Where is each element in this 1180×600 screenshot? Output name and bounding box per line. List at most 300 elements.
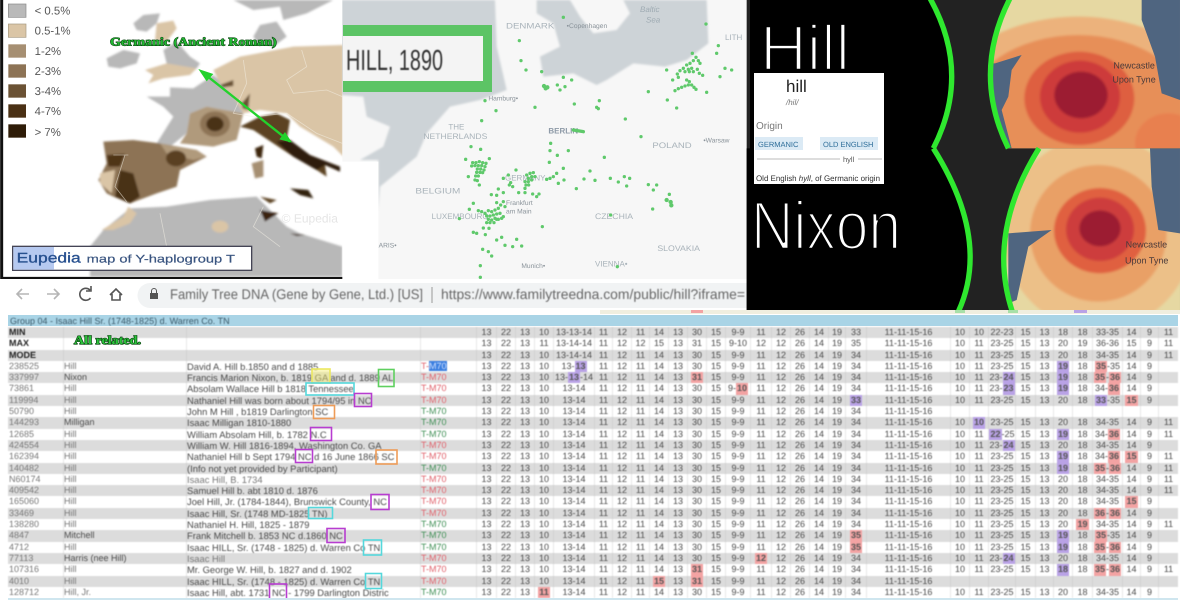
row 238525: 9 bbox=[1147, 361, 1152, 371]
row 119994: 19 bbox=[832, 395, 842, 405]
row MIN: 12 bbox=[617, 327, 627, 337]
row 77113: 12 bbox=[776, 553, 786, 563]
row MAX: 12 bbox=[756, 338, 766, 348]
row 4847: 12 bbox=[776, 530, 786, 540]
row 73861: 13 bbox=[520, 383, 530, 393]
row 128712: 13 bbox=[673, 587, 683, 597]
row N60174: 19 bbox=[832, 474, 842, 484]
row 409542: 9 bbox=[1147, 485, 1152, 495]
white patch bbox=[340, 162, 378, 280]
row 140482: 10 bbox=[955, 463, 965, 473]
row 337997: Francis Marion Nixon, b. 1819 GA and d. 1889 AL bbox=[187, 372, 393, 383]
row 128712: 11 bbox=[974, 587, 984, 597]
row MODE: 13 bbox=[481, 350, 492, 360]
row 12685: 22 bbox=[990, 429, 1000, 439]
row 12685: 19 bbox=[1058, 429, 1068, 439]
row 424554: 10 bbox=[955, 440, 965, 450]
row 4010: 11 bbox=[599, 576, 608, 586]
row 107316: 34 bbox=[851, 564, 861, 574]
row 4010: 19 bbox=[832, 576, 842, 586]
row MAX: 15 bbox=[711, 338, 721, 348]
row 138280: 13 bbox=[673, 519, 683, 529]
row 165060: 15 bbox=[711, 496, 721, 506]
row 138280: 9-9 bbox=[731, 519, 744, 529]
row 4847: 14 bbox=[1126, 530, 1136, 540]
row 77113: Isaac Hill bbox=[187, 553, 225, 564]
row 138280: T-M70 bbox=[421, 519, 447, 529]
row 73861: 11 bbox=[599, 383, 608, 393]
row 128712: 11 bbox=[636, 587, 645, 597]
row 140482: 14 bbox=[654, 463, 664, 473]
row 424554: William W. Hill 1816-1894, Washington Co. GA bbox=[187, 440, 382, 451]
row 409542 bbox=[8, 485, 1178, 496]
heat map: Hill bbox=[993, 0, 1180, 148]
row MIN bbox=[8, 327, 1178, 338]
row 409542: 12 bbox=[617, 485, 627, 495]
row 50790: 26 bbox=[795, 406, 805, 416]
row 77113: 26 bbox=[795, 553, 805, 563]
row 128712: 15 bbox=[711, 587, 721, 597]
row 4847: 14 bbox=[654, 530, 664, 540]
row MIN: 26 bbox=[795, 327, 805, 337]
row 107316: 11 bbox=[756, 564, 766, 574]
row 162394: 10 bbox=[955, 451, 965, 461]
address text: site name: Family Tree DNA (Gene by Gene, Ltd.) [US] bbox=[170, 286, 423, 302]
row 12685: 18 bbox=[1077, 429, 1088, 439]
row 144293: 9-9 bbox=[731, 417, 744, 427]
row 165060: 22 bbox=[501, 496, 511, 506]
row 107316: 14 bbox=[654, 564, 664, 574]
row 4712: 14 bbox=[654, 542, 664, 552]
row 4712: 12 bbox=[776, 542, 786, 552]
row 140482: 13 bbox=[673, 463, 683, 473]
row 162394: 14 bbox=[654, 451, 664, 461]
row 138280: 34 bbox=[851, 519, 861, 529]
dictionary card: hill: Origin bbox=[756, 121, 783, 132]
row 424554: 30 bbox=[692, 440, 702, 450]
row N60174: 12 bbox=[617, 474, 627, 484]
row 107316: 19 bbox=[832, 564, 842, 574]
row 238525: 238525 bbox=[9, 361, 39, 371]
callout: HILL, 1890: HILL, 1890 bbox=[346, 45, 443, 77]
label: Newcastle Upon Tyne: Newcastle bbox=[1113, 60, 1155, 70]
row 4712: 11 bbox=[599, 542, 608, 552]
row MODE: 13 bbox=[673, 350, 683, 360]
row 238525 bbox=[8, 361, 1178, 372]
row 337997: 18 bbox=[1077, 372, 1088, 382]
row 337997: 13- -14 bbox=[555, 372, 593, 382]
row 12685: 14 bbox=[654, 429, 664, 439]
row MAX: 11-11-15-16 bbox=[885, 338, 932, 348]
row 77113: 11-11-15-16 bbox=[885, 553, 932, 563]
row 138280: 14 bbox=[654, 519, 664, 529]
row 73861: 10 bbox=[955, 383, 965, 393]
row 4847: 13 bbox=[481, 530, 492, 540]
row 12685: 13 bbox=[481, 429, 492, 439]
row 165060: 18 bbox=[1077, 496, 1088, 506]
row 4712: 11 bbox=[756, 542, 766, 552]
row MAX: 19 bbox=[832, 338, 842, 348]
row 12685: T-M70 bbox=[421, 429, 447, 439]
row 4847: 11 bbox=[636, 530, 645, 540]
row 33469: 14 bbox=[814, 508, 824, 518]
row 409542: 11 bbox=[599, 485, 608, 495]
row 12685: 19 bbox=[832, 429, 842, 439]
row 107316: 22 bbox=[501, 564, 511, 574]
row 33469: 14 bbox=[1126, 508, 1136, 518]
row 4847: 14 bbox=[814, 530, 824, 540]
row 424554: 34-35 bbox=[1096, 440, 1119, 450]
row 33469: 20 bbox=[1058, 508, 1068, 518]
row 144293: 11 bbox=[599, 417, 608, 427]
row 4847: 13 bbox=[673, 530, 683, 540]
row 73861: 11 bbox=[974, 383, 984, 393]
row 12685 bbox=[8, 429, 1178, 440]
row 77113: 9 bbox=[1147, 553, 1152, 563]
row 409542: 14 bbox=[654, 485, 664, 495]
row 140482: 15 bbox=[711, 463, 721, 473]
row 73861: 26 bbox=[795, 383, 805, 393]
row MAX: 13 bbox=[520, 338, 530, 348]
dictionary card: hill: /hil/ bbox=[785, 98, 799, 107]
row 424554: 14 bbox=[814, 440, 824, 450]
row 4712: 18 bbox=[1077, 542, 1088, 552]
row 140482: 18 bbox=[1077, 463, 1088, 473]
row 119994: 15 bbox=[1126, 395, 1136, 405]
row 33469: 9 bbox=[1147, 508, 1152, 518]
row MODE: 23-25 bbox=[990, 350, 1014, 360]
row MAX: 15 bbox=[1020, 338, 1030, 348]
arc: inner left top bbox=[930, 0, 952, 148]
row 50790: 15 bbox=[711, 406, 721, 416]
row 4847 bbox=[8, 530, 1178, 542]
row MAX: 15 bbox=[1126, 338, 1136, 348]
map label: Slovakia: SLOVAKIA bbox=[657, 244, 700, 253]
row 165060: 13 bbox=[520, 496, 530, 506]
row 140482: 11 bbox=[974, 463, 984, 473]
row 337997: 13 bbox=[520, 372, 530, 382]
row 144293: 20 bbox=[1058, 417, 1068, 427]
highlight: NC bbox=[371, 494, 389, 510]
row 12685: Hill bbox=[64, 429, 76, 439]
row 33469: T-M70 bbox=[421, 508, 447, 518]
row N60174: 13 bbox=[520, 474, 530, 484]
row 12685: 11 bbox=[756, 429, 766, 439]
row 33469: Hill bbox=[64, 508, 76, 518]
row MIN: 10 bbox=[974, 327, 984, 337]
row 77113: T-M70 bbox=[421, 553, 447, 563]
row 73861: 10 bbox=[737, 383, 747, 393]
row 77113: 34 bbox=[851, 553, 861, 563]
row 409542: 22 bbox=[501, 485, 511, 495]
row 140482: 11 bbox=[1164, 463, 1173, 473]
row 33469: 11 bbox=[974, 508, 984, 518]
row 107316: 26 bbox=[795, 564, 805, 574]
row 50790: 11 bbox=[599, 406, 608, 416]
row 424554: 13 bbox=[481, 440, 492, 450]
row 162394: 23-25 bbox=[990, 451, 1014, 461]
row 73861: 13 bbox=[673, 383, 683, 393]
highlight: SC bbox=[314, 406, 334, 418]
row 424554: 12 bbox=[617, 440, 627, 450]
row 238525: 11-11-15-16 bbox=[885, 361, 932, 371]
row 138280: 13 bbox=[1039, 519, 1050, 529]
row 238525: -35 bbox=[1107, 361, 1120, 371]
row 77113: 23- bbox=[989, 553, 1002, 563]
row 162394: 9-9 bbox=[731, 451, 744, 461]
row 4010: 13 bbox=[481, 576, 492, 586]
highlight: TN bbox=[366, 574, 382, 588]
row MODE: 14 bbox=[814, 350, 824, 360]
row 119994: 33 bbox=[851, 395, 861, 405]
row 144293: 34-35 bbox=[1096, 417, 1119, 427]
dictionary card: hill: hyll bbox=[843, 155, 855, 164]
row 73861: 9- bbox=[728, 383, 736, 393]
legend label: 1-2% bbox=[35, 45, 61, 58]
row 162394: 34- bbox=[1095, 451, 1108, 461]
row 337997: 24 bbox=[1004, 372, 1014, 382]
row 77113: 77113 bbox=[9, 553, 33, 563]
row 33469: 11 bbox=[636, 508, 645, 518]
row 424554: 11 bbox=[756, 440, 766, 450]
row 409542: 12 bbox=[776, 485, 786, 495]
row 50790: John M Hill , b1819 Darlington SC bbox=[187, 406, 328, 417]
row N60174: 9-9 bbox=[731, 474, 744, 484]
row 33469: 11-11-15-16 bbox=[885, 508, 932, 518]
highlight: N.C bbox=[310, 428, 332, 440]
row MAX: 11 bbox=[599, 338, 608, 348]
row 138280: 11 bbox=[636, 519, 645, 529]
row 107316: 14 bbox=[1126, 564, 1136, 574]
row 107316: - bbox=[1106, 564, 1109, 574]
row 144293: 11-11-15-16 bbox=[885, 417, 932, 427]
row 73861: 11 bbox=[756, 383, 766, 393]
row 4712: 23-25 bbox=[990, 542, 1014, 552]
row 33469: 34 bbox=[851, 508, 861, 518]
panel: Eupedia haplogroup T map bbox=[0, 0, 343, 279]
row 424554: 424554 bbox=[9, 440, 39, 450]
row N60174: 14 bbox=[654, 474, 664, 484]
row 424554: 22 bbox=[501, 440, 511, 450]
row 4847: 9-9 bbox=[731, 530, 744, 540]
row 162394: 19 bbox=[1058, 451, 1068, 461]
row 238525: 19 bbox=[1058, 361, 1068, 371]
row 50790: 11 bbox=[756, 406, 766, 416]
row 4847: 13 bbox=[1039, 530, 1050, 540]
row MODE: 10 bbox=[955, 350, 965, 360]
row 162394: 15 bbox=[1126, 451, 1136, 461]
row 119994: T-M70 bbox=[421, 395, 447, 405]
row 50790: T-M70 bbox=[421, 406, 447, 416]
row N60174: 10 bbox=[539, 474, 549, 484]
legend label: 2-3% bbox=[35, 65, 61, 78]
row 165060: 11 bbox=[599, 496, 608, 506]
row 77113 bbox=[8, 553, 1178, 564]
row 33469: 15 bbox=[1020, 508, 1030, 518]
row 409542: 18 bbox=[1077, 485, 1088, 495]
row 238525: 10 bbox=[539, 361, 549, 371]
row MIN: 10 bbox=[539, 327, 549, 337]
row 144293: 13 bbox=[1039, 417, 1050, 427]
dictionary card: hill: GERMANIC bbox=[758, 140, 799, 149]
row 33469: 12 bbox=[776, 508, 786, 518]
row 162394: 14 bbox=[814, 451, 824, 461]
row 424554: 18 bbox=[1077, 440, 1088, 450]
row 107316: T-M70 bbox=[421, 564, 447, 574]
row 119994: 11-11-15-16 bbox=[885, 395, 932, 405]
row 107316: 13 bbox=[481, 564, 492, 574]
row 409542: 19 bbox=[832, 485, 842, 495]
row 162394: 162394 bbox=[9, 451, 39, 461]
dictionary card: hill: OLD ENGLISH bbox=[823, 140, 873, 149]
row 119994: 9 bbox=[1147, 395, 1152, 405]
row N60174: 11 bbox=[1164, 474, 1173, 484]
row 128712: 14 bbox=[1126, 587, 1136, 597]
row 140482: 10 bbox=[539, 463, 549, 473]
row N60174: 30 bbox=[692, 474, 702, 484]
row 4010: Isaac HILL, Sr. (1748 - 1825) d. Warren Co TN bbox=[187, 576, 380, 587]
row 144293: 13 bbox=[673, 417, 683, 427]
row 138280: 19 bbox=[832, 519, 842, 529]
row 337997: 26 bbox=[795, 372, 805, 382]
row 4712: 11 bbox=[974, 542, 984, 552]
row 4010: 22 bbox=[501, 576, 511, 586]
highlight: Tennessee bbox=[306, 383, 354, 395]
row MIN: 14 bbox=[1126, 327, 1136, 337]
row 12685: 10 bbox=[955, 429, 965, 439]
icon: back arrow bbox=[17, 289, 29, 299]
row MIN: 19 bbox=[832, 327, 842, 337]
row 77113: 34-35 bbox=[1096, 553, 1119, 563]
row 107316: 12 bbox=[617, 564, 627, 574]
row 77113: 14 bbox=[654, 553, 664, 563]
row MIN: 11 bbox=[1164, 327, 1173, 337]
row 119994: 13 bbox=[481, 395, 492, 405]
row MIN: 33-35 bbox=[1096, 327, 1119, 337]
row 33469: 22 bbox=[501, 508, 511, 518]
row 33469: 36 bbox=[1110, 508, 1120, 518]
row 4712: Isaac HILL, Sr. (1748 - 1825) d. Warren Co TN bbox=[187, 542, 380, 553]
row 140482: 36 bbox=[1110, 463, 1120, 473]
row 50790: 13-14 bbox=[562, 406, 586, 416]
callout: HILL, 1890 bbox=[343, 25, 492, 92]
row N60174: 20 bbox=[1058, 474, 1068, 484]
row 138280: 26 bbox=[795, 519, 805, 529]
row 107316: 9-9 bbox=[731, 564, 744, 574]
row 140482: 19 bbox=[832, 463, 842, 473]
row MAX: 15 bbox=[654, 338, 664, 348]
row 409542: 11 bbox=[636, 485, 645, 495]
row 424554: 34 bbox=[851, 440, 861, 450]
row MAX: 26 bbox=[795, 338, 805, 348]
row 73861: Absolam Wallace Hill b 1818 Tennessee bbox=[187, 383, 354, 394]
row 165060: 15 bbox=[1126, 496, 1136, 506]
row 119994: 9-9 bbox=[731, 395, 744, 405]
row 119994: 15 bbox=[711, 395, 721, 405]
table bottom rule bbox=[8, 598, 1178, 600]
row 4847: 15 bbox=[1020, 530, 1030, 540]
row 409542: 9-9 bbox=[731, 485, 744, 495]
row N60174: 22 bbox=[501, 474, 511, 484]
row MODE: 34 bbox=[851, 350, 861, 360]
row 140482: 30 bbox=[692, 463, 702, 473]
row 144293: 18 bbox=[1077, 417, 1088, 427]
row 144293: 14 bbox=[1126, 417, 1136, 427]
row 409542: 34-35 bbox=[1096, 485, 1119, 495]
row 337997: 34 bbox=[851, 372, 861, 382]
row 4712: 11 bbox=[636, 542, 645, 552]
row 165060: T-M70 bbox=[421, 496, 447, 506]
row 337997: 11 bbox=[599, 372, 608, 382]
row 50790: 11 bbox=[636, 406, 645, 416]
row 4010: 11 bbox=[756, 576, 766, 586]
row 4010: 31 bbox=[692, 576, 702, 586]
row 128712: 9-9 bbox=[731, 587, 744, 597]
row 162394: 30 bbox=[692, 451, 702, 461]
row 238525: 26 bbox=[795, 361, 805, 371]
row 165060: 14 bbox=[814, 496, 824, 506]
row 162394: 11 bbox=[599, 451, 608, 461]
row 107316: Hill bbox=[64, 564, 76, 574]
row 73861: 10 bbox=[539, 383, 549, 393]
row MAX: 13 bbox=[1039, 338, 1050, 348]
row 77113: 11 bbox=[636, 553, 645, 563]
row 138280: 9 bbox=[1147, 519, 1152, 529]
row 107316: 14 bbox=[814, 564, 824, 574]
row 12685: 13-14 bbox=[562, 429, 586, 439]
row 128712: 11-11-15-16 bbox=[885, 587, 932, 597]
row 128712: 11 bbox=[599, 587, 608, 597]
row N60174: 13 bbox=[673, 474, 683, 484]
row 119994: 12 bbox=[617, 395, 627, 405]
row 409542: 30 bbox=[692, 485, 702, 495]
row 128712: Isaac Hill, abt. 1731 NC - 1799 Darlington Distric bbox=[187, 587, 389, 598]
legend label: 4-7% bbox=[35, 105, 61, 118]
row 12685: William Absolam Hill, b. 1782 N.C bbox=[187, 429, 327, 440]
row 140482: 14 bbox=[814, 463, 824, 473]
row 138280: Hill bbox=[64, 519, 76, 529]
row 50790: 12 bbox=[776, 406, 786, 416]
row 4712: 35 bbox=[851, 542, 861, 552]
row N60174: T-M70 bbox=[421, 474, 447, 484]
row 73861: 11 bbox=[636, 383, 645, 393]
row MODE bbox=[8, 350, 1178, 361]
highlight: GA bbox=[312, 369, 330, 383]
row 409542: 15 bbox=[1020, 485, 1030, 495]
row 238525: 12 bbox=[617, 361, 627, 371]
row 424554: 13 bbox=[673, 440, 683, 450]
row 107316: 10 bbox=[955, 564, 965, 574]
row MIN: 18 bbox=[1058, 327, 1068, 337]
row 144293: 13 bbox=[481, 417, 492, 427]
row 50790: 14 bbox=[654, 406, 664, 416]
row 140482: 13 bbox=[481, 463, 492, 473]
row 162394: Nathaniel Hill b Sept 1794 NC d 16 June 1866 SC bbox=[187, 451, 394, 462]
row 140482: 9-9 bbox=[731, 463, 744, 473]
row 119994: 18 bbox=[1077, 395, 1088, 405]
row 77113: 15 bbox=[1020, 553, 1030, 563]
row 162394: 9 bbox=[1147, 451, 1152, 461]
row 50790: 50790 bbox=[9, 406, 34, 416]
row 4712: 13 bbox=[673, 542, 683, 552]
row 4712: - bbox=[1106, 542, 1109, 552]
row 424554: 20 bbox=[1058, 440, 1068, 450]
row 409542: 23-25 bbox=[990, 485, 1014, 495]
row 424554: 11 bbox=[599, 440, 608, 450]
row 4712: 15 bbox=[711, 542, 721, 552]
row 4010 bbox=[8, 576, 1178, 587]
row N60174: 23-25 bbox=[990, 474, 1014, 484]
